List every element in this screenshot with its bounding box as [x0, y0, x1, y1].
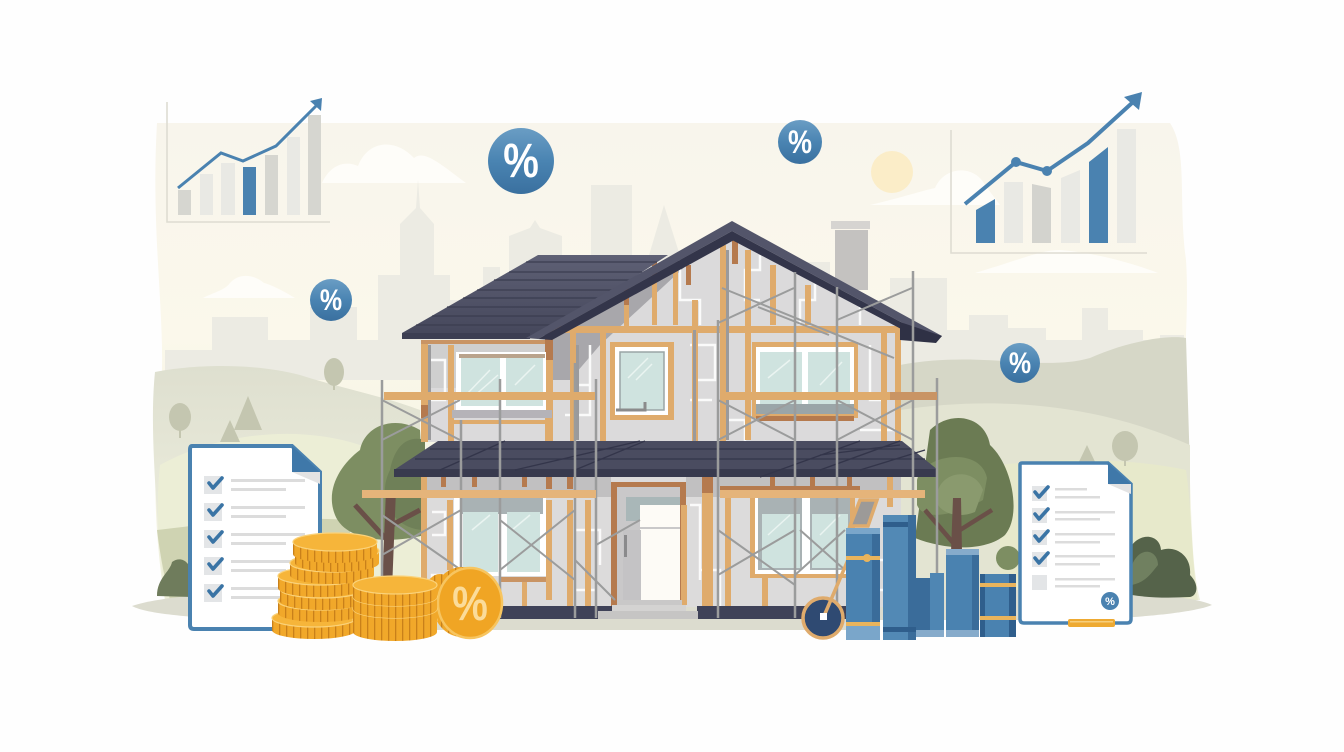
background trees: [169, 358, 1138, 468]
left tree: [332, 423, 425, 590]
left checklist document: [190, 446, 320, 629]
roll 3: [916, 573, 944, 637]
front steps: [598, 600, 698, 619]
lower right window: [750, 498, 855, 578]
measuring wheel: [803, 500, 877, 638]
scaffolding: [382, 271, 937, 620]
clouds: [203, 145, 1158, 298]
chimney: [831, 221, 870, 290]
lower roof: [394, 441, 938, 477]
upper left window: [452, 352, 552, 424]
roll 4: [946, 549, 979, 637]
percent badge large: [488, 128, 554, 194]
lower wall: [421, 477, 901, 618]
percent badge top: [778, 120, 822, 164]
upper middle window: [610, 342, 674, 420]
percent coin: [426, 567, 502, 638]
upper wall: [421, 232, 901, 445]
scaffold planks: [362, 392, 937, 498]
foundation: [421, 606, 877, 619]
right tree: [915, 418, 1020, 570]
percent badge right: [1000, 343, 1040, 383]
bushes: [157, 537, 1196, 598]
chart: left rising bars: [167, 98, 330, 222]
coin stack right: [353, 576, 437, 641]
roll 2: [883, 515, 916, 640]
ground shadow: [132, 590, 1212, 620]
roll 1: [846, 528, 880, 640]
percent badge right: %: [1009, 346, 1031, 380]
hills: [153, 337, 1198, 600]
upper right window: [752, 342, 858, 421]
gable roof: [526, 221, 942, 343]
chart: right rising bars: [951, 92, 1147, 253]
upper studs: [421, 245, 901, 442]
door: [611, 482, 687, 607]
background wash: [155, 123, 1200, 600]
right checklist document: %: [1105, 596, 1115, 608]
insulation rolls: [846, 515, 1016, 640]
pencil: [1068, 619, 1115, 627]
percent badge left: %: [320, 283, 342, 317]
left upper roof: [402, 255, 668, 339]
roll 5: [980, 574, 1016, 637]
right checklist document: [1020, 463, 1131, 623]
percent badge top: %: [788, 125, 812, 161]
sun: [871, 151, 913, 193]
percent badge left: [310, 279, 352, 321]
lower left window: [454, 498, 546, 582]
percent badge large: %: [503, 135, 539, 188]
coin stack left: [272, 533, 379, 639]
city skyline: [165, 180, 1184, 380]
percent coin: %: [452, 578, 488, 631]
house: [362, 221, 942, 620]
